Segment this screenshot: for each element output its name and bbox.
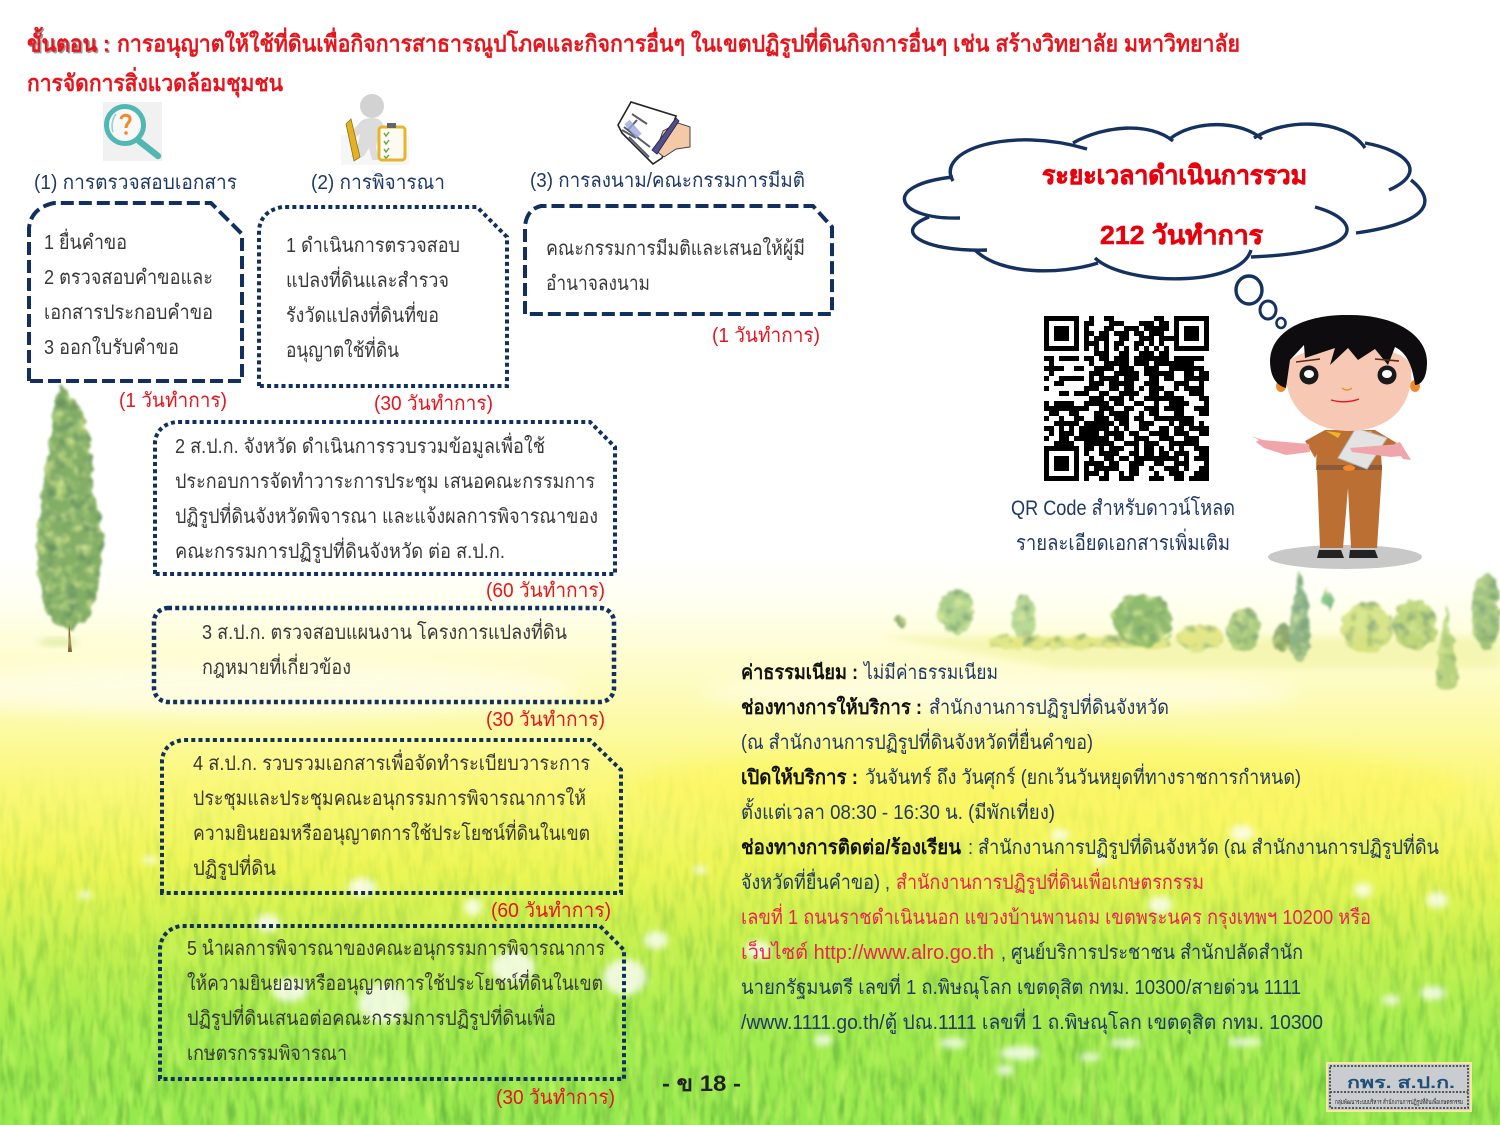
title: ขั้นตอน : [27,26,110,56]
panel: submit to agricultural land reform committee: ปฏิรูปที่ดินเสนอต่อคณะกรรมการปฏิรูปที่ดินเพื่อ [187,1004,556,1031]
heading: step 1: (1) การตรวจสอบเอกสาร [34,172,237,194]
panel: document check steps: 2 ตรวจสอบคำขอและ [44,267,213,289]
distant trees [880,570,1500,690]
duration: step 7: (30 วันทำการ) [496,1087,615,1109]
info line: contacts and complaints: , ศูนย์บริการประชาชน สำนักปลัดสำนัก [1001,941,1303,965]
character: officer in uniform [1251,315,1427,569]
panel: subcommittee agenda: ปฏิรูปที่ดิน [193,854,276,881]
panel: subcommittee agenda: ประชุมและประชุมคณะอนุกรรมการพิจารณาการให้ [193,787,586,811]
panel: ALRO plan review: 3 ส.ป.ก. ตรวจสอบแผนงาน โครงการแปลงที่ดิน [202,618,567,644]
panel: document check steps: 1 ยื่นคำขอ [44,228,127,254]
duration: step 3: (1 วันทำการ) [712,325,820,347]
background: meadow landscape [0,383,1500,1125]
QR code caption: QR Code สำหรับดาวน์โหลด [1011,496,1235,520]
QR code caption: รายละเอียดเอกสารเพิ่มเติม [1016,528,1230,555]
panel: provincial ALRO data collection: ปฏิรูปที่ดินจังหวัดพิจารณา และแจ้งผลการพิจารณาของ [175,502,598,529]
panel: consideration steps: แปลงที่ดินและสำรวจ [286,266,449,292]
info line: fee: ไม่มีค่าธรรมเนียม [862,661,998,684]
panel: provincial ALRO data collection: คณะกรรมการปฏิรูปที่ดินจังหวัด ต่อ ส.ป.ก. [175,537,505,564]
logo badge [1327,1063,1471,1111]
panel: committee resolution: อำนาจลงนาม [546,273,650,295]
info line: service hours [741,763,1301,824]
duration: step 5: (30 วันทำการ) [486,709,605,731]
title: การอนุญาตให้ใช้ที่ดินเพื่อกิจการสาธารณูปโภคและกิจการอื่นๆ ในเขตปฏิรูปที่ดินกิจการอื่นๆ เช่น สร้างวิทยาลัย มหาวิทยาลัย [117,26,1240,58]
panel: subcommittee agenda: 4 ส.ป.ก. รวบรวมเอกสารเพื่อจัดทำระเบียบวาระการ [193,749,590,775]
panel: provincial ALRO data collection [155,422,615,574]
logo badge: กพร. ส.ป.ก. [1347,1075,1455,1092]
info line: service hours: เปิดให้บริการ : [741,765,858,789]
info line: contacts and complaints: จังหวัดที่ยื่นคำขอ) , [741,868,890,894]
panel: consideration steps: อนุญาตใช้ที่ดิน [286,336,399,363]
panel: document check steps [29,203,242,381]
QR code [1044,318,1209,478]
panel: submit to agricultural land reform committee: เกษตรกรรมพิจารณา [187,1043,347,1065]
info line: contacts and complaints: เว็บไซต์ http://www.alro.go.th [741,939,994,964]
QR code caption [1011,496,1235,555]
cloud: total duration [904,123,1425,282]
tree: left poplar [37,387,103,652]
page number: - ข 18 - [662,1071,741,1096]
heading: step 3: (3) การลงนาม/คณะกรรมการมีมติ [530,170,805,192]
panel: consideration steps: 1 ดำเนินการตรวจสอบ [286,235,460,257]
duration: step 4: (60 วันทำการ) [486,580,605,602]
panel: consideration steps [259,207,507,386]
duration: step 1: (1 วันทำการ) [119,390,227,412]
panel: provincial ALRO data collection: 2 ส.ป.ก. จังหวัด ดำเนินการรวบรวมข้อมูลเพื่อใช้ [175,432,545,459]
panel: ALRO plan review [154,608,614,702]
info line: service hours: วันจันทร์ ถึง วันศุกร์ (ยกเว้นวันหยุดที่ทางราชการกำหนด) [865,763,1301,790]
heading: step 2: (2) การพิจารณา [311,172,445,194]
info line: contacts and complaints: ช่องทางการติดต่อ/ร้องเรียน [741,836,961,859]
info line: fee [741,661,998,684]
panel: consideration steps: รังวัดแปลงที่ดินที่ขอ [286,301,439,327]
title: การจัดการสิ่งแวดล้อมชุมชน [27,66,283,98]
title: ขั้นตอน : [28,28,112,58]
info line: service channel: ช่องทางการให้บริการ : [741,695,922,719]
info line: contacts and complaints: /www.1111.go.th/ตู้ ปณ.1111 เลขที่ 1 ถ.พิษณุโลก เขตดุสิต กทม. 10300 [741,1008,1323,1035]
icon: magnifier with question mark [103,102,162,161]
info line: contacts and complaints: เลขที่ 1 ถนนราชดำเนินนอก แขวงบ้านพานถม เขตพระนคร กรุงเทพฯ 10200 หรือ [741,903,1371,930]
info line: service channel [741,693,1169,755]
info line: contacts and complaints: : สำนักงานการปฏิรูปที่ดินจังหวัด (ณ สำนักงานการปฏิรูปที่ดิน [968,833,1439,860]
panel: document check steps: เอกสารประกอบคำขอ [44,302,213,324]
panel: subcommittee agenda: ความยินยอมหรืออนุญาตการใช้ประโยชน์ที่ดินในเขต [193,819,590,846]
panel: subcommittee agenda [162,740,621,893]
cloud: total duration: 212 วันทำการ [1100,220,1263,250]
panel: ALRO plan review: กฎหมายที่เกี่ยวข้อง [202,653,351,679]
icon: hand signing a document [618,102,690,164]
title [27,26,1240,98]
info line: contacts and complaints: นายกรัฐมนตรี เลขที่ 1 ถ.พิษณุโลก เขตดุสิต กทม. 10300/สายด่วน 1111 [741,973,1301,1000]
panel: provincial ALRO data collection: ประกอบการจัดทำวาระการประชุม เสนอคณะกรรมการ [175,471,595,494]
info: fee, channels and contacts [741,661,1439,1035]
panel: committee resolution: คณะกรรมการมีมติและเสนอให้ผู้มี [546,237,805,261]
info line: service channel: สำนักงานการปฏิรูปที่ดินจังหวัด [929,693,1169,720]
panel: submit to agricultural land reform committee [160,926,624,1079]
duration: step 2: (30 วันทำการ) [374,393,493,415]
duration: step 6: (60 วันทำการ) [491,900,611,922]
panel: document check steps: 3 ออกใบรับคำขอ [44,336,179,359]
info line: contacts and complaints: สำนักงานการปฏิรูปที่ดินเพื่อเกษตรกรรม [896,868,1204,895]
info line: contacts and complaints [741,833,1439,1035]
cloud: total duration: ระยะเวลาดำเนินการรวม [1042,160,1307,190]
panel: committee resolution [525,206,832,314]
info line: service hours: ตั้งแต่เวลา 08:30 - 16:30 น. (มีพักเที่ยง) [741,798,1055,824]
panel: submit to agricultural land reform committee: ให้ความยินยอมหรืออนุญาตการใช้ประโยชน์ที่ดินในเขต [187,969,603,996]
info line: service channel: (ณ สำนักงานการปฏิรูปที่ดินจังหวัดที่ยื่นคำขอ) [741,728,1093,755]
icon: figure with pencil and checklist [341,94,409,165]
info line: fee: ค่าธรรมเนียม : [741,661,858,684]
thought bubbles [1236,276,1286,328]
panel: submit to agricultural land reform committee: 5 นำผลการพิจารณาของคณะอนุกรรมการพิจารณาการ [187,938,605,961]
